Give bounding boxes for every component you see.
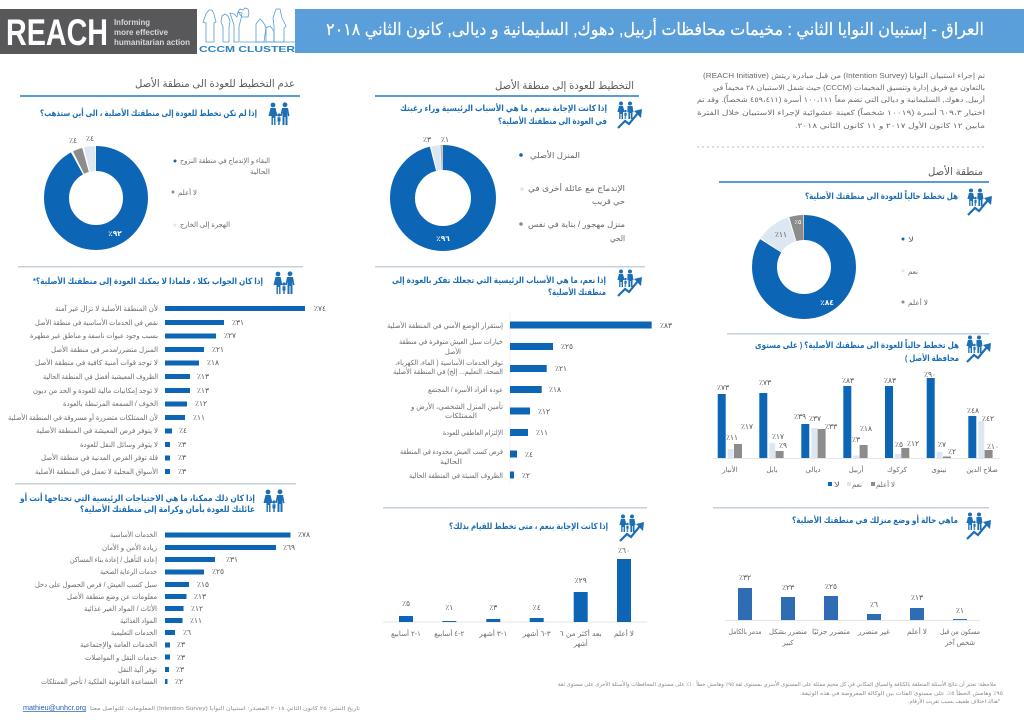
bar chart: نقص في الخدمات الأساسية في منطقة الأصل [35,318,158,327]
bar chart: ٦٪ [183,628,191,637]
bar chart: الأثاث / المواد الغير غذائية [84,604,157,613]
bar chart: ٣٪ [176,665,184,674]
grouped column chart: ١٧٪ [741,422,753,431]
bar chart [387,313,672,483]
bar chart: تأمين المنزل الشخصي، الأرض و [410,401,503,411]
donut chart [56,134,136,238]
intro text block: مابين ١٢ كانون الأول ٢٠١٧ و ١١ كانون الثاني ٢٠١٨. [795,121,985,130]
bar chart: المنزل متضرر/مدمر في منطقة الأصل [51,345,158,354]
legend: لا [834,482,840,489]
logo: CCCM Cluster [199,8,295,54]
legend: نعم [908,269,918,276]
icon: family [274,271,294,294]
column chart: لا أعلم [907,627,927,636]
grouped column chart: ٣٪ [852,435,860,444]
bar chart: إستقرار الوضع الأمني في المنطقة الأصلية [387,321,503,330]
question: هل تخطط حالياً للعودة الى منطقتك الأصلية؟ ( على مستوى [755,338,959,351]
grouped column chart: ٢٪ [948,447,956,456]
panel: main reasons for considering return [387,270,672,483]
column chart [725,573,980,647]
grouped column chart: ١٢٪ [907,439,919,448]
column chart: بعد أكثر من ٦ [560,629,602,638]
bar chart: ٢٪ [175,677,183,686]
bar chart: سبل كسب العيش / فرص الحصول على دخل [35,581,157,589]
question: إذا كان ذلك ممكنا، ما هي الاحتياجات الرئيسية التي تحتاجها أنت أو [19,492,255,504]
bar chart: لأن المنطقة الأصلية لا تزال غير آمنة [55,304,158,313]
footnote [558,680,1003,705]
bar chart: لا توجد قوات أمنية كافية في منطقة الأصل [35,358,158,367]
bar chart: المواد الغذائية [120,618,157,625]
column chart: ٤٪ [533,603,541,612]
grouped column chart: ٧٣٪ [759,378,771,387]
bar chart: المساعدة القانونية الملكية / تأجير الممتلكات [41,676,157,686]
bar chart: ٣٪ [178,453,186,462]
question: إذا كان الجواب بكلا ، فلماذا لا يمكنك العودة إلى منطقتك الأصلية؟* [33,276,263,287]
grouped column chart: ١٧٪ [772,432,784,441]
bar chart: ٢١٪ [212,345,224,354]
bar chart: ١٥٪ [197,580,209,589]
bar chart: ١٣٪ [197,372,209,381]
icon: family with arrow [617,270,642,296]
donut chart: ٤٪ [69,136,77,145]
donut chart [402,135,484,243]
icon: family with arrow [966,512,991,539]
donut chart: ٤٪ [86,134,94,143]
bar chart: الخوف / السمعة المرتبطة بالعودة [63,401,158,408]
grouped column chart: ٣٩٪ [794,412,806,421]
panel: plans by governorate [713,336,1000,489]
legend: لا أعلم [908,298,928,307]
bar chart: ٢٥٪ [212,567,224,576]
column chart: كبير [782,639,794,647]
intro text block: بالتعاون مع فريق إدارة وتنسيق المخيمات (CCCM) حيث شمل الاستبيان ٢٨ مخيماً في [713,82,985,92]
bar chart: ٣١٪ [232,318,244,327]
bar chart: الخدمات العامة والإجتماعية [80,642,157,649]
donut chart: ٩٦٪ [436,234,450,243]
legend: الحي [610,234,625,243]
panel: planning to return, conditions donut [375,79,642,243]
intro text block [697,73,985,130]
question [392,275,606,297]
column chart: ١٪ [956,606,964,615]
bar chart: الخدمات الأساسية [110,530,157,539]
donut chart: ٣٪ [423,135,431,144]
panel: when planning to return [383,514,647,648]
bar chart: الإلتزام العاطفي للعودة [443,430,503,437]
question: هل تخطط حالياً للعودة الى منطقتك الأصلية؟ [805,189,958,202]
column chart: متضرر بشكل [769,628,807,636]
bar chart: ٢٪ [522,471,530,480]
logo: CCCM Cluster: CCCM CLUSTER [199,44,295,54]
icon: family with arrow [619,514,644,541]
bar chart: ١٨٪ [549,385,561,394]
question: إذا لم تكن تخطط للعودة إلى منطقتك الأصلية ، الى أين ستذهب؟ [40,107,257,119]
bar chart: إعادة التأهيل / إعادة بناء المساكن [70,554,157,564]
legend: لا [908,237,914,244]
grouped column chart: ٣٧٪ [809,414,821,423]
icon: family with arrow [966,336,991,362]
column chart: أشهر [573,639,588,648]
bar chart: ١٣٪ [197,386,209,395]
bar chart: الحالية [440,459,462,466]
column chart: ٦٠٪ [618,546,630,555]
bar chart: الظروف المعيشية أفضل في المنطقة الحالية [43,372,158,381]
bar chart: الظروف السيئة في المنطقة الحالية [409,473,503,480]
donut chart: ٨٤٪ [820,298,834,307]
grouped column chart: بابل [766,467,778,474]
bar chart: ٢١٪ [555,364,567,373]
bar chart: خيارات سبل العيش متوفرة في منطقة [399,339,503,346]
column chart: ٦٪ [870,600,878,609]
bar chart: معلومات عن وضع منطقة الأصل [67,592,157,601]
legend: الحالية [250,169,270,176]
panel: no plan to return, destination donut [20,77,300,238]
logo: REACH: more effective [114,28,169,37]
column chart: ١٪ [445,603,453,612]
grouped column chart: ٤٨٪ [967,406,979,415]
bar chart: عودة أفراد الأسرة / المجتمع [428,385,503,394]
question: منطقتك الأصلية؟ [548,287,606,297]
panel: area of origin, current plans donut [719,165,992,307]
bar chart: ١١٪ [193,413,205,422]
heading: عدم التخطيط للعودة الى منطقة الأصل [135,77,295,90]
bar chart: ٣٪ [178,467,186,476]
column chart: ٣٪ [489,603,497,612]
intro text block: تم إجراء استبيان النوايا (Intention Survey) من قبل مبادرة ريتش (REACH Initiative) [703,73,985,80]
bar chart: ٢٧٪ [224,331,236,340]
column chart: ٢٣٪ [782,583,794,592]
grouped column chart: ٩٠٪ [924,370,936,379]
grouped column chart: ٩٪ [779,441,787,450]
grouped column chart: ٣٣٪ [825,422,837,431]
question: في العودة الى منطقتك الأصلية؟ [498,116,607,127]
bar chart: ١١٪ [190,616,202,625]
donut chart: ١١٪ [775,230,787,239]
icon: family with arrow [967,188,992,215]
logo: REACH: Informing [114,18,150,27]
footnote: *هناك اختلاف طفيف بسبب تقريب الأرقام. [908,697,1001,705]
grouped column chart [713,370,1000,474]
bar chart: الأصل [445,347,461,356]
legend: نعم [852,482,862,489]
grouped column chart: ١٨٪ [860,424,872,433]
column chart: ٢٩٪ [575,576,587,585]
footer credits [23,705,361,712]
column chart: ١-٢ أسابيع [391,629,421,638]
grouped column chart: ديالى [805,467,821,474]
question: ماهي حالة أو وضع منزلك في منطقتك الأصلية؟ [792,514,958,526]
question: محافظة الأصل ) [905,353,959,363]
column chart: شخص آخر [944,638,975,647]
grouped column chart: ٥٪ [895,440,903,449]
question [755,338,959,363]
bar chart: فرص كسب العيش محدودة في المنطقة [400,448,503,456]
legend: منزل مهجور / بناية في نفس [528,220,625,229]
bar chart: ٦٩٪ [283,543,295,552]
footer credits: تاريخ النشر: ٢٥ كانون الثاني ٢٠١٨ المصدر: استبيان النوايا (Intention Survey) المعلومات: للتواصل معنا [90,705,361,712]
bar chart: ١٢٪ [538,407,550,416]
heading: منطقة الأصل [928,165,983,178]
bar chart: ٣٪ [177,653,185,662]
bar chart: ٤٪ [179,426,187,435]
grouped column chart: الأنبار [721,465,738,474]
bar chart: ١٣٪ [194,592,206,601]
legend: البقاء و الإندماج في منطقة النزوح [180,158,270,165]
bar chart: الممتلكات [445,412,477,420]
legend: حي قريب [592,197,625,206]
bar chart: خدمات الرعاية الصحية [100,569,157,576]
grouped column chart: ٧٪ [938,440,946,449]
bar chart: ١٢٪ [191,604,203,613]
footnote: ملاحظة: تعتبر أن نتائج الأسئلة المتعلقة بالكثافة والسياق المكاني في كل مخيم ممثلة على المستوى الأسري بمستوى ثقة ٩٥٪ وهامش خطأ ١٠٪ على مستوى المحافظات والأسئلة الأخرى على مستوى ثقة [558,680,996,688]
legend [902,237,928,307]
legend: المنزل الأصلي [530,150,580,160]
column chart: مسكون من قبل [940,628,980,636]
bar chart: ٣٪ [178,440,186,449]
icon: family [264,489,284,512]
bar chart: ١٢٪ [195,399,207,408]
panel: house condition [725,512,991,647]
legend: الإندماج مع عائلة أخرى في [528,183,625,194]
bar chart: لأن الممتلكات متضررة أو مسروقة في المنطقة الأصلية [8,413,158,422]
donut chart: ١٪ [441,135,449,144]
bar chart: قلة توفر الفرص المدنية في منطقة الأصل [41,453,158,462]
donut chart: ٩٢٪ [108,229,122,238]
bar chart: الصحة، التعليم... إلخ) في المنطقة الأصلية [393,367,503,376]
donut chart [764,219,844,307]
bar chart: ٧٨٪ [298,530,310,539]
bar chart: ٧٤٪ [314,304,326,313]
intro text block: اختيار ٦٠٩،٣ أسرة (١٠٠١٩ شخصاً) كعينة عشوائية لإجراء الاستبيان خلال الفترة [697,107,985,117]
footer credits: mathieu@unhcr.org [23,705,86,712]
panel: reasons for not being able to return [8,271,326,476]
column chart: لا أعلم [614,629,634,638]
bar chart: ٣١٪ [226,555,238,564]
icon: family with arrow [617,102,642,128]
question [400,103,607,127]
legend: لا أعلم [178,188,197,197]
column chart: ٢٥٪ [825,582,837,591]
bar chart: خدمات النقل و المواصلات [85,655,157,662]
legend: لا أعلم [876,480,895,489]
bar chart: ٣٪ [177,640,185,649]
bar chart [8,304,326,476]
bar chart: ١٨٪ [207,358,219,367]
question: إذا كانت الإجابة بنعم ، متى تخطط للقيام بذلك؟ [449,521,608,532]
column chart: ٢-٤ أسابيع [434,629,465,638]
question: إذا نعم، ما هي الأسباب الرئيسية التي تجعلك تفكر بالعودة إلى [392,275,606,286]
grouped column chart: كركوك [887,466,908,474]
legend [828,480,895,489]
bar chart: لا يتوفر وسائل النقل للعودة [80,442,158,449]
grouped column chart: ١٠٪ [987,442,999,451]
grouped column chart: ٤٢٪ [982,414,994,423]
bar chart: ٢٥٪ [561,342,573,351]
intro text block: أربيل, دهوك, السليمانية و ديالى التي تضم معاً ١٠٠،١١١ أسرة (٤٥٩،٤١١ شخصاً). وقد تم [697,94,985,104]
panel: needs to return safely and with dignity [19,489,310,686]
question: إذا كانت الإجابة بنعم , ما هي الأسباب الرئيسية وراء رغبتك [400,103,607,114]
bar chart: الخدمات التعليمية [111,630,157,637]
heading: التخطيط للعودة إلى منطقة الأصل [495,79,634,92]
column chart: متضرر جزئيًا [812,629,850,636]
bar chart: الأسواق المحلية لا تعمل في المنطقة الأصلية [35,467,158,476]
icon: family [268,102,290,125]
bar chart: توفر آلية النقل [118,665,157,674]
column chart: ١٣٪ [911,593,923,602]
bar chart: زيادة الأمن و الأمان [102,543,157,552]
legend: الهجرة إلى الخارج [180,222,230,229]
logo: REACH: humanitarian action [114,38,190,47]
grouped column chart: ٧٣٪ [717,383,729,392]
question: عائلتك للعودة بأمان وكرامة إلى منطقتك الأصلية؟ [80,503,255,515]
grouped column chart: أربيل [849,465,863,474]
bar chart: ١١٪ [536,428,548,437]
footnote: ٩٥٪ وهامش الخطأ ٥٪. على مستوى الفئات بين الوكالة المعروضة في هذه الوثيقة. [800,689,1003,697]
grouped column chart: نينوى [931,467,947,474]
bar chart: ٨٣٪ [660,321,672,330]
bar chart: توفر الخدمات الأساسية ( الماء، الكهرباء، [395,358,503,367]
grouped column chart: ٨٣٪ [842,376,854,385]
column chart [383,546,647,648]
column chart: ٥٪ [402,599,410,608]
bar chart: ٤٪ [525,450,533,459]
logo: REACH: REACH [6,12,108,53]
logo: REACH [0,9,197,54]
column chart: مدمر بالكامل [728,628,762,636]
bar chart [35,530,310,686]
column chart: ١-٣ أشهر [478,629,507,638]
bar chart: لا يتوفر فرص المعيشة في المنطقة الأصلية [36,426,158,435]
donut chart: ٥٪ [794,219,802,226]
legend [172,158,270,229]
column chart: غير متضرر [857,629,890,636]
bar chart: لا توجد إمكانيات مالية للعودة و الحد من ديون [33,387,158,395]
grouped column chart: صلاح الدين [966,467,998,474]
title banner [295,9,1024,53]
grouped column chart: ١١٪ [726,433,738,442]
title banner: العراق - إستبيان النوايا الثاني : مخيمات محافظات أربيل, دهوك, السليمانية و ديالى, كانون الثاني ٢٠١٨ [326,18,984,40]
question [19,492,255,515]
bar chart: بسبب وجود عبوات ناسفة و مناطق غير مطهرة [30,333,158,340]
column chart: ٣٢٪ [739,573,751,582]
column chart: ٣-٦ أشهر [522,629,551,638]
grouped column chart: ٨٣٪ [884,376,896,385]
legend [519,150,625,243]
